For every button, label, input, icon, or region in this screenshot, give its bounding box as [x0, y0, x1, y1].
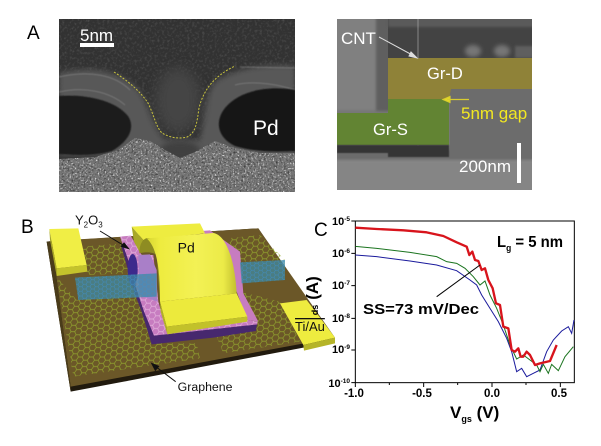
- annotation arrow: [437, 265, 480, 297]
- panel label B: B: [21, 217, 34, 238]
- dark dip above substrate: [161, 142, 200, 154]
- x axis title: (V): [472, 403, 499, 422]
- y tick labels: [328, 216, 350, 390]
- gate length label: g: [506, 243, 511, 253]
- Y2O3 label: 3: [98, 221, 103, 230]
- CNT label: CNT: [341, 29, 376, 48]
- left Pd grain: [59, 96, 131, 155]
- substrate: [59, 138, 295, 192]
- Pd gate: [132, 223, 247, 334]
- axes frame: [355, 221, 574, 383]
- Pd label: Pd: [178, 240, 195, 256]
- panel label C: C: [314, 220, 328, 241]
- Gr-D yellow electrode: [388, 58, 532, 99]
- substrate: [47, 228, 335, 392]
- graphene trace: [114, 66, 235, 138]
- y tick labels: -8: [344, 313, 350, 320]
- arch dark end: [128, 254, 138, 286]
- ticks: [351, 221, 560, 387]
- y tick labels: 10: [332, 248, 344, 260]
- carbon nanotube right segment: [240, 260, 285, 283]
- y tick labels: -10: [341, 378, 350, 385]
- x tick labels: 0.5: [551, 388, 568, 400]
- y tick labels: -9: [344, 344, 350, 351]
- panel: TEM micrograph: [59, 19, 295, 192]
- scale label 5nm: 5nm: [80, 26, 113, 45]
- grey gate oxide band: [59, 66, 295, 155]
- Gr-S label: Gr-S: [373, 121, 408, 139]
- oxide underlayer dark: [121, 245, 257, 344]
- graphene sheets: [57, 235, 300, 377]
- green curve: [355, 246, 573, 373]
- y tick labels: 10: [332, 216, 344, 228]
- right lower grey: [450, 89, 532, 150]
- carbon nanotube left segment: [75, 273, 157, 300]
- Ti/Au gold pad: [280, 300, 335, 351]
- y tick labels: -5: [344, 216, 350, 223]
- Graphene arrow: [152, 363, 176, 382]
- band streaks: [59, 67, 295, 105]
- Y2O3 label: O: [88, 212, 98, 227]
- back pink flank: [138, 254, 157, 302]
- left gold pad: [49, 228, 87, 276]
- bright particles: [465, 45, 481, 57]
- gate length label: = 5 nm: [511, 234, 563, 251]
- y axis subscript: ds: [310, 305, 320, 315]
- panel: SEM micrograph: [337, 19, 532, 190]
- chart: transfer curves: [351, 221, 574, 387]
- y tick labels: 10: [328, 378, 341, 390]
- x axis title: gs: [461, 414, 472, 424]
- x tick labels: 0.0: [484, 388, 500, 400]
- y tick labels: 10: [332, 313, 344, 325]
- 200nm label: 200nm: [459, 157, 511, 176]
- CNT line: [417, 19, 419, 58]
- y tick labels: 10: [332, 344, 344, 356]
- panel label A: A: [27, 23, 40, 44]
- x tick labels: [344, 388, 568, 400]
- Y2O3 arrow: [100, 231, 129, 249]
- x axis title: V: [450, 403, 461, 422]
- Ti/Au label: Ti/Au: [295, 319, 325, 334]
- y tick labels: -6: [344, 248, 350, 255]
- scale bar: [517, 143, 521, 183]
- Y2O3 label: 2: [84, 221, 89, 230]
- Pd label: Pd: [253, 117, 279, 140]
- gap label: 5nm gap: [461, 104, 527, 123]
- subthreshold swing label: SS=73 mV/Dec: [363, 301, 479, 318]
- Y2O3 label: Y: [75, 212, 84, 227]
- x tick labels: -1.0: [344, 388, 364, 400]
- x tick labels: -0.5: [412, 388, 433, 400]
- gate length label: L: [497, 234, 507, 251]
- Graphene label: Graphene: [178, 380, 233, 394]
- right Pd grain: [219, 88, 295, 151]
- y tick labels: -7: [344, 280, 350, 287]
- Gr-D label: Gr-D: [427, 65, 463, 83]
- blue curve: [355, 255, 574, 377]
- Y2O3 pink layer: [120, 236, 257, 336]
- red curve: [355, 228, 557, 365]
- Gr-S green electrode: [337, 99, 449, 145]
- lighter channel area: [156, 68, 200, 132]
- y axis title: (A): [303, 276, 322, 300]
- panel: device schematic: [47, 212, 335, 394]
- gap arrow: [443, 96, 469, 102]
- y tick labels: 10: [332, 280, 344, 292]
- upper left grey block: [337, 19, 374, 108]
- scale bar: [80, 43, 114, 47]
- upper dark region: [388, 19, 532, 58]
- dark undercut: [337, 145, 449, 157]
- CNT arrow: [379, 37, 417, 58]
